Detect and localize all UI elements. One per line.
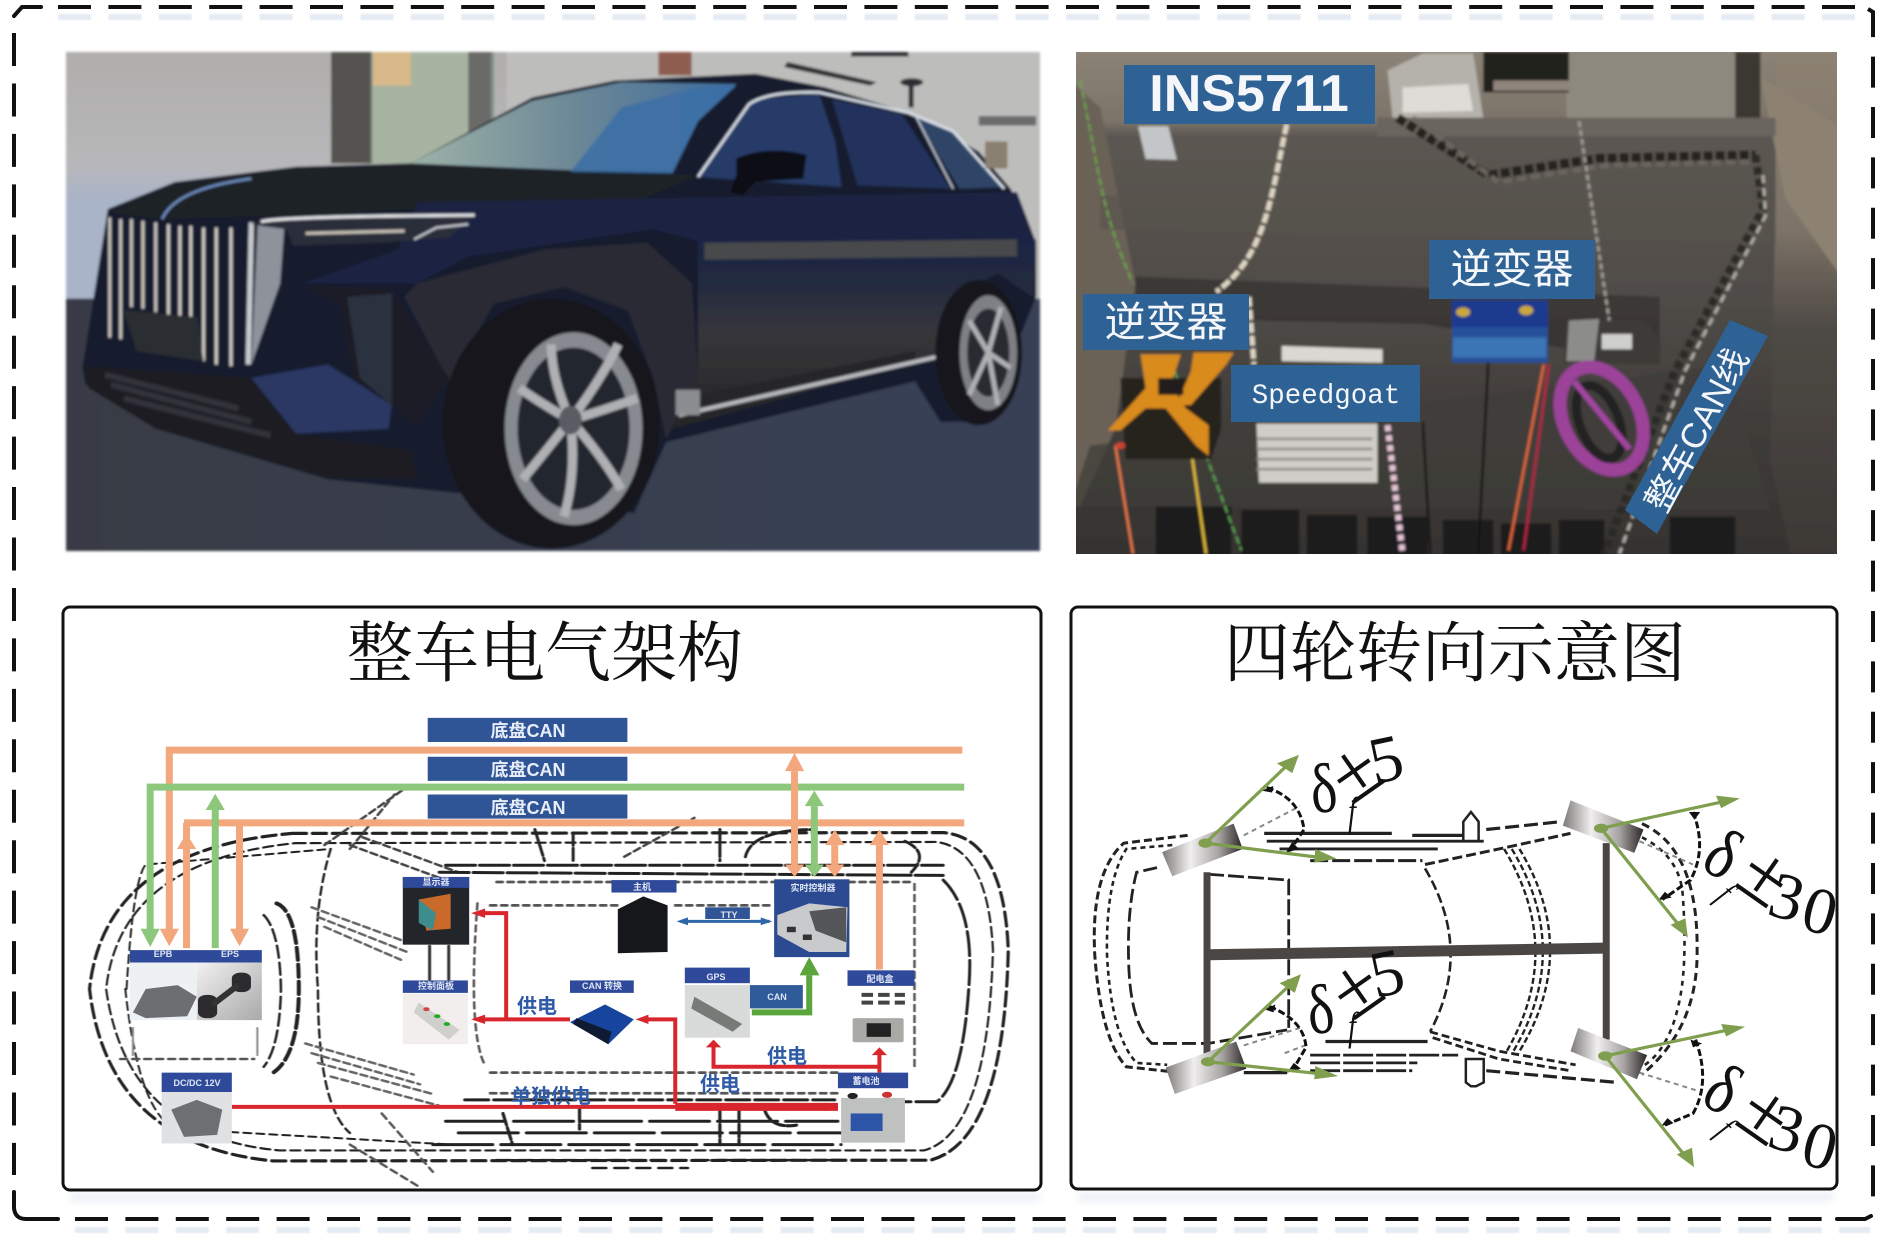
component: control panel [403,980,468,1044]
heading: four-wheel steering: 四轮转向示意图 [1224,618,1686,691]
blue battery [1452,300,1548,363]
annotation: rear-right angle: 3 [1761,1090,1812,1169]
speedgoat box [1256,346,1382,483]
text: bus and component labels: GPS [706,972,726,982]
headlight [251,215,475,246]
grille [110,217,285,366]
annotation: rear-left angle: ± [1310,937,1399,1037]
annotation: rear-right angle: ± [1722,1063,1811,1163]
CAN buses and arrows [130,718,964,1143]
text: bus and component labels: 供电 [700,1073,740,1096]
component: power distribution box [848,970,914,1042]
annotation: front-right angle: δ [1691,812,1756,896]
text: bus and component labels: 底盘CAN [490,720,566,741]
text: bus and component labels: TTY [720,910,738,920]
annotation: front-right angle: 3 [1761,858,1812,937]
chassis frame [1207,843,1606,1063]
label: chassis CAN bars [428,718,627,819]
text: bus and component labels: CAN 转换 [582,980,622,991]
annotation: rear-left angle: f [1348,1005,1359,1049]
component: industrial computer [611,880,677,953]
orange inverter [1108,353,1234,459]
text: bus and component labels: 显示器 [422,877,450,887]
text: bus and component labels: 控制面板 [418,980,454,991]
lower bumper [86,366,417,479]
label: vehicle CAN line [1625,320,1768,534]
windows [411,82,1004,195]
panel: four-wheel steering diagram [1071,607,1845,1201]
annotation: front-left angle: ± [1309,721,1398,821]
text: bus and component labels: DC/DC 12V [173,1078,221,1088]
label: inverter left [1083,294,1249,350]
green CAN link [750,957,819,1012]
annotation: front-left angle: f [1348,790,1359,834]
wiring [1080,81,1766,554]
trunk background [1070,50,1846,557]
TTY link [677,907,772,925]
component: power inverter [570,980,634,1044]
sticker note [1138,126,1177,160]
angle arcs [1267,787,1703,1125]
label: vehicle CAN line: 整车CAN线 [1638,342,1757,518]
annotation: front-right angle [1691,812,1845,951]
door sill [676,351,940,415]
text: bus and component labels [154,720,894,1108]
annotation: front-left angle: 5 [1362,720,1410,799]
component: battery [838,1073,908,1143]
vehicle top-view outline [90,787,1008,1187]
heading: architecture: 整车电气架构 [347,618,743,691]
text: bus and component labels: 底盘CAN [490,797,566,818]
front wheel [443,299,660,549]
text: bus and component labels: EPB [154,949,173,959]
text: bus and component labels: 供电 [517,995,557,1018]
photo: test vehicle [60,50,1049,555]
annotation: rear-right angle: δ [1691,1047,1756,1131]
label: inverter right [1429,240,1595,299]
label: Speedgoat: Speedgoat [1252,381,1400,412]
wall and ground background [60,50,1049,555]
annotation: front-right angle: 0 [1794,872,1845,951]
headrest and bracket [1377,47,1776,136]
annotation: rear-left angle: 5 [1363,934,1411,1013]
roof antenna [784,52,1036,168]
text: bus and component labels: 主机 [633,881,651,892]
green steering arrows [1205,765,1729,1156]
text: bus and component labels: 供电 [767,1045,807,1068]
panel: vehicle electrical architecture [63,607,1041,1201]
label: INS5711: INS5711 [1149,65,1349,123]
power lines [232,913,879,1107]
gray controller [1564,319,1661,364]
label: Speedgoat [1231,365,1420,422]
annotation: rear-left angle: δ [1302,970,1339,1050]
component: display [403,877,469,945]
component: DCDC [162,1073,232,1143]
arrowheads [160,753,889,946]
label: inverter right: 逆变器 [1450,246,1574,292]
annotation: front-left angle: δ [1305,749,1342,829]
annotation: rear-right angle: f [1709,1111,1745,1147]
annotation: rear-right angle: 0 [1794,1107,1845,1186]
annotation: front-right angle: ± [1722,825,1811,925]
annotation: front-right angle: f [1709,876,1745,912]
purple cable [1547,362,1656,475]
wheels [1162,800,1647,1094]
text: bus and component labels: 实时控制器 [790,882,836,893]
rear wheel [935,280,1022,425]
vehicle outline [1094,806,1697,1090]
label: inverter left: 逆变器 [1104,299,1228,345]
annotation: rear-right angle [1691,1047,1845,1186]
bus lines [150,750,964,970]
text: bus and component labels: 单独供电 [511,1085,591,1108]
text: bus and component labels: 蓄电池 [852,1075,880,1086]
text: bus and component labels: EPS [221,949,239,959]
component: steering and brake [130,950,262,1020]
text: bus and component labels: 底盘CAN [490,759,566,780]
component: real-time controller [774,879,849,957]
photo: trunk equipment [1070,47,1846,557]
car body [82,74,1036,513]
text: bus and component labels: CAN [767,992,787,1002]
component: INS unit [685,968,750,1038]
text: bus and component labels: 配电盒 [866,973,894,984]
